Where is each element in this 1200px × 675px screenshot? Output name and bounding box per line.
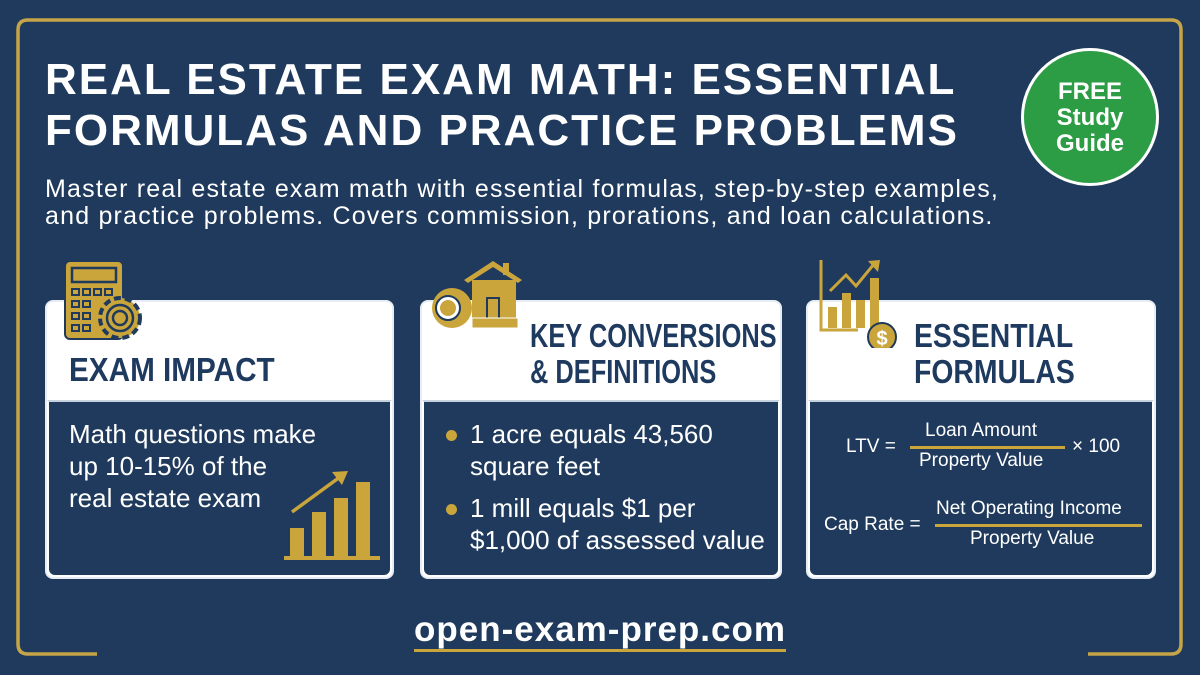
- icon: growth chart with dollar: [820, 260, 897, 348]
- formula: LTV: Loan Amount: [925, 420, 1037, 441]
- subtitle: and practice problems. Covers commission, prorations, and loan calculations.: [45, 202, 994, 230]
- bullet: mill: [446, 493, 765, 555]
- heading: key conversions: [530, 317, 777, 390]
- bullet: acre: [446, 419, 713, 481]
- heading: exam impact: EXAM IMPACT: [69, 351, 275, 388]
- bullet: acre: 1 acre equals 43,560: [470, 419, 713, 449]
- heading: key conversions: & DEFINITIONS: [530, 353, 716, 390]
- text: math questions: [69, 419, 316, 513]
- formula: LTV: × 100: [1072, 436, 1120, 457]
- text: math questions: real estate exam: [69, 483, 261, 513]
- formula: cap rate: Cap Rate =: [824, 514, 921, 535]
- formula: LTV: [846, 420, 1120, 471]
- formula: cap rate: [824, 498, 1142, 549]
- panel: key conversions: [420, 300, 782, 579]
- title: FORMULAS AND PRACTICE PROBLEMS: [45, 106, 959, 155]
- panel: exam impact: [45, 300, 394, 579]
- title: [45, 55, 959, 155]
- footer url: open-exam-prep.com: [414, 610, 786, 649]
- heading: key conversions: KEY CONVERSIONS: [530, 317, 777, 354]
- icon: calculator gear: [64, 262, 142, 340]
- badge: free study guide: Guide: [1056, 130, 1124, 157]
- heading: essential formulas: [914, 317, 1075, 390]
- heading: essential formulas: ESSENTIAL: [914, 317, 1073, 354]
- panel: essential formulas: [806, 300, 1156, 579]
- formula: cap rate: Property Value: [970, 528, 1094, 549]
- bullet: mill: 1 mill equals $1 per: [470, 493, 695, 523]
- bullet: acre: square feet: [470, 451, 600, 481]
- badge: free study guide: FREE: [1058, 78, 1122, 105]
- formula: cap rate: Net Operating Income: [936, 498, 1122, 519]
- heading: essential formulas: FORMULAS: [914, 353, 1075, 390]
- text: math questions: Math questions make: [69, 419, 316, 449]
- badge: free study guide: Study: [1057, 104, 1123, 131]
- formula: LTV: Property Value: [919, 450, 1043, 471]
- text: math questions: up 10-15% of the: [69, 451, 267, 481]
- subtitle: Master real estate exam math with essential formulas, step-by-step examples,: [45, 175, 999, 203]
- title: REAL ESTATE EXAM MATH: ESSENTIAL: [45, 55, 956, 104]
- subtitle: [45, 175, 999, 230]
- icon: bar chart with arrow: [284, 471, 380, 560]
- badge: free study guide: [1021, 48, 1159, 186]
- icon: house with tape measure: [432, 261, 522, 328]
- bullet: mill: $1,000 of assessed value: [470, 525, 765, 555]
- formula: LTV: LTV =: [846, 436, 896, 457]
